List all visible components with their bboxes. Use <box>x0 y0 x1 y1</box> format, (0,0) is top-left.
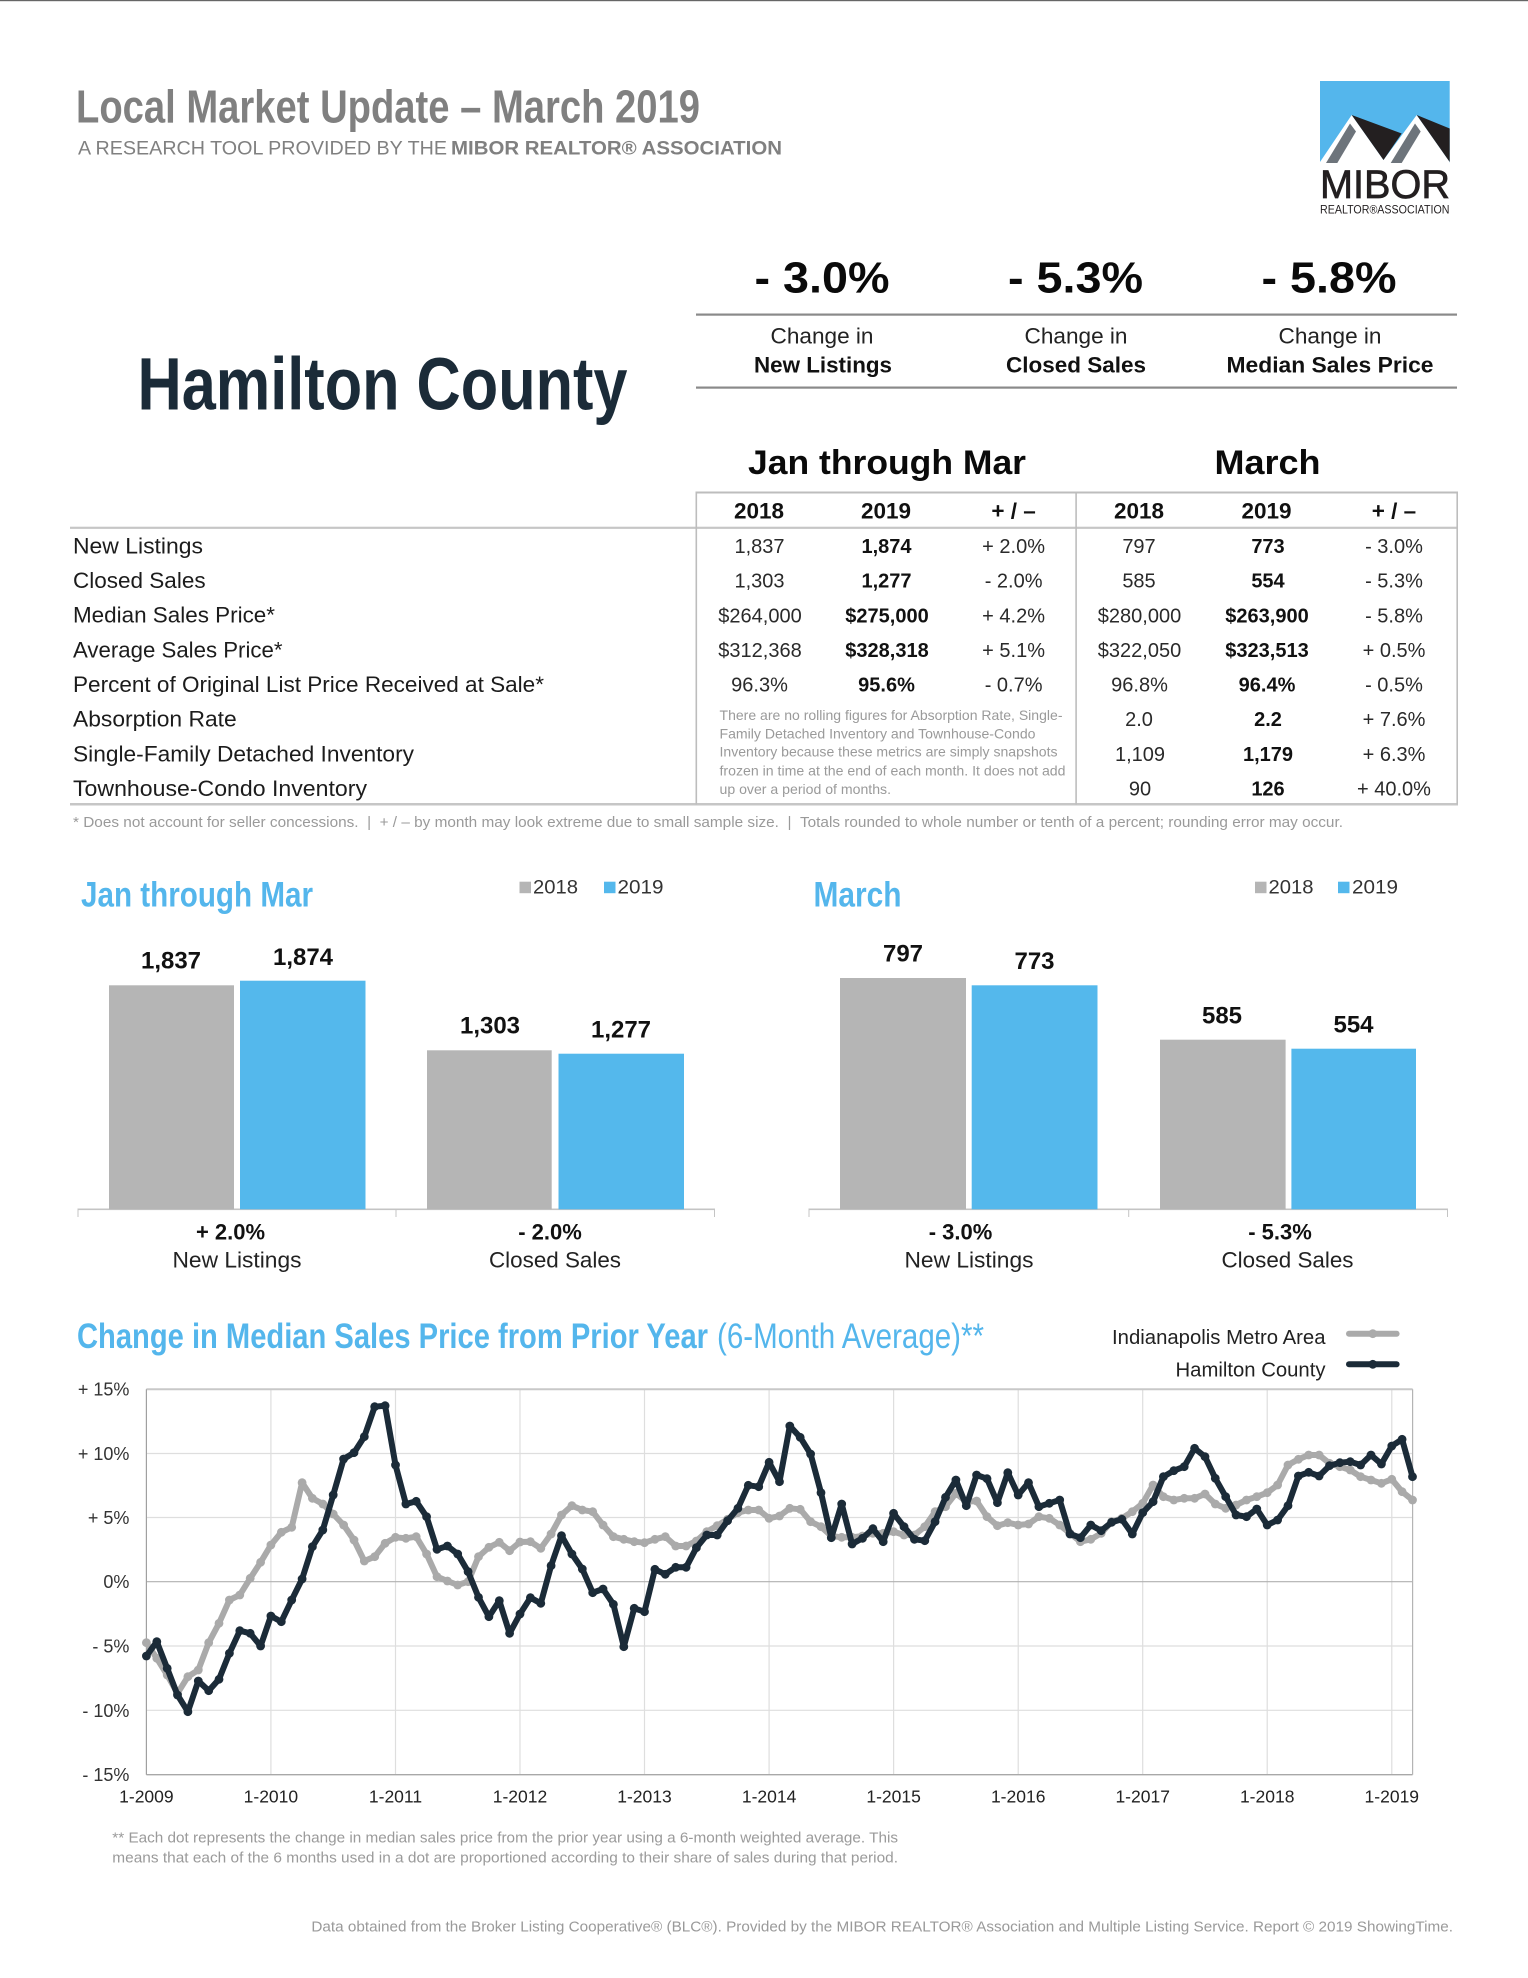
legend: 2019 <box>1352 876 1398 898</box>
row: Single-Family Detached Inventory <box>73 742 1426 767</box>
subtitle: MIBOR REALTOR® ASSOCIATION <box>451 138 782 160</box>
row: Townhouse-Condo Inventory: 90 <box>1129 778 1151 800</box>
category: new listings: + 2.0% <box>196 1219 265 1244</box>
table header row: 2018 <box>734 498 784 523</box>
icon: MIBOR logo: MIBOR <box>1320 163 1450 207</box>
x axis labels: 1-2015 <box>866 1787 921 1807</box>
legend <box>1255 876 1398 898</box>
label: new listings: New Listings <box>754 352 892 377</box>
row: New Listings: - 3.0% <box>1365 536 1423 558</box>
legend <box>520 876 664 898</box>
row: Average Sales Price: $312,368 <box>718 640 802 662</box>
row: Closed Sales: 1,277 <box>861 571 912 593</box>
row: New Listings: + 2.0% <box>982 536 1045 558</box>
label: closed sales: Closed Sales <box>1006 352 1146 377</box>
row: Absorption Rate: Absorption Rate <box>73 707 237 732</box>
row: Closed Sales <box>73 568 1423 593</box>
row: Absorption Rate: + 7.6% <box>1363 709 1426 731</box>
row: Average Sales Price: + 0.5% <box>1363 640 1426 662</box>
note: dot explanation: means that each of the 6 months used in a dot are proportioned according to their share of sales during that period. <box>112 1850 898 1866</box>
title: Local Market Update – March 2019 <box>76 80 700 132</box>
note: no rolling figures: up over a period of months. <box>720 782 891 797</box>
note: no rolling figures: frozen in time at the end of each month. It does not add <box>720 764 1066 779</box>
legend: 2018 <box>1268 876 1314 898</box>
table header row: + / – <box>991 498 1036 523</box>
row: Percent of Original List Price <box>73 672 1423 697</box>
note: no rolling figures <box>720 708 1066 797</box>
row: Percent of Original List Price: Percent of Original List Price Received at Sale* <box>73 672 544 697</box>
table header row: 2018 <box>1114 498 1164 523</box>
x axis labels: 1-2018 <box>1240 1787 1294 1807</box>
row: Closed Sales: 554 <box>1251 571 1286 593</box>
x axis labels: 1-2016 <box>991 1787 1045 1807</box>
category: new listings: New Listings <box>172 1247 302 1272</box>
category: closed sales <box>489 1219 621 1272</box>
row: Percent of Original List Price: 96.4% <box>1239 675 1296 697</box>
row: Average Sales Price <box>73 637 1426 662</box>
x axis labels: 1-2011 <box>369 1787 422 1807</box>
label: median sales price: Change in <box>1278 323 1382 348</box>
bar values: 1,303 <box>460 1012 520 1039</box>
row: Closed Sales: 585 <box>1122 571 1156 593</box>
note: no rolling figures: Family Detached Inventory and Townhouse-Condo <box>720 726 1036 741</box>
heading: line chart title: (6-Month Average)** <box>717 1317 984 1356</box>
row: Median Sales Price: $263,900 <box>1225 605 1309 627</box>
heading: county name: Hamilton County <box>138 342 628 425</box>
row: Absorption Rate <box>73 707 1426 732</box>
bars: closed sales <box>1160 1040 1416 1209</box>
row: Percent of Original List Price: 96.8% <box>1111 675 1168 697</box>
y axis labels: + 10% <box>78 1444 129 1464</box>
row: Absorption Rate: 2.2 <box>1254 709 1282 731</box>
table header row: + / – <box>1372 498 1416 523</box>
row: Percent of Original List Price: - 0.7% <box>985 675 1043 697</box>
heading: line chart title: Change in Median Sales Price from Prior Year <box>77 1317 708 1356</box>
row: Median Sales Price: $275,000 <box>845 605 929 627</box>
heading: Jan through Mar: Jan through Mar <box>748 444 1026 482</box>
bar values: 1,837 <box>141 947 201 974</box>
bar values <box>883 941 1374 1039</box>
x axis labels: 1-2013 <box>617 1787 672 1807</box>
row: Single-Family Detached Inventory: 1,109 <box>1115 744 1165 766</box>
x axis labels: 1-2014 <box>742 1787 797 1807</box>
bar values: 1,277 <box>591 1017 651 1044</box>
x axis labels: 1-2017 <box>1115 1787 1170 1807</box>
row: New Listings: 1,837 <box>734 536 785 558</box>
panel: metrics table <box>70 444 1458 806</box>
row: Percent of Original List Price: - 0.5% <box>1365 675 1423 697</box>
series: Indianapolis Metro Area <box>146 1455 1412 1693</box>
bar values: 554 <box>1333 1012 1374 1039</box>
row: Median Sales Price: Median Sales Price* <box>73 603 275 628</box>
row: Average Sales Price: + 5.1% <box>982 640 1045 662</box>
x axis labels: 1-2010 <box>244 1787 298 1807</box>
label: median sales price <box>1226 323 1434 377</box>
row: Closed Sales: - 2.0% <box>985 571 1043 593</box>
label: closed sales <box>1006 323 1146 377</box>
bar chart: Jan through Mar <box>78 876 715 1272</box>
header: report title <box>76 80 782 160</box>
category: closed sales: Closed Sales <box>489 1247 621 1272</box>
category: closed sales: - 5.3% <box>1248 1219 1312 1244</box>
bar values <box>141 944 651 1044</box>
row: New Listings: New Listings <box>73 534 203 559</box>
y axis labels: - 5% <box>92 1636 129 1656</box>
bar values: 585 <box>1202 1002 1242 1029</box>
row: Single-Family Detached Inventory: 1,179 <box>1243 744 1293 766</box>
category: closed sales <box>1222 1219 1354 1272</box>
row: Townhouse-Condo Inventory <box>73 776 1431 801</box>
label: median sales price: Median Sales Price <box>1226 352 1434 377</box>
x axis labels: 1-2009 <box>119 1787 174 1807</box>
row: Townhouse-Condo Inventory: + 40.0% <box>1357 778 1431 800</box>
row: Median Sales Price: $264,000 <box>718 605 802 627</box>
row: Median Sales Price: $280,000 <box>1098 605 1181 627</box>
x axis labels <box>119 1787 1419 1807</box>
row: Average Sales Price: Average Sales Price* <box>73 637 283 662</box>
category: closed sales: Closed Sales <box>1222 1247 1354 1272</box>
y axis labels: 0% <box>103 1572 129 1592</box>
legend: 2019 <box>618 876 664 898</box>
bars: new listings <box>840 978 1098 1209</box>
row: Townhouse-Condo Inventory: Townhouse-Condo Inventory <box>73 776 368 801</box>
panel: key change figures <box>696 254 1457 389</box>
y axis labels: - 10% <box>82 1701 129 1721</box>
category: new listings <box>904 1219 1034 1272</box>
row: Closed Sales: - 5.3% <box>1365 571 1423 593</box>
legend: 2018 <box>533 876 578 898</box>
row: Absorption Rate: 2.0 <box>1125 709 1153 731</box>
heading: Jan through Mar <box>81 876 313 915</box>
table header row: 2019 <box>861 498 911 523</box>
row: New Listings: 1,874 <box>861 536 912 558</box>
category: new listings: New Listings <box>904 1247 1034 1272</box>
row: Average Sales Price: $322,050 <box>1098 640 1181 662</box>
table header row: 2019 <box>1241 498 1292 523</box>
footer: data source: Data obtained from the Broker Listing Cooperative® (BLC®). Provided by the MIBOR REALTOR® Association and Multiple Listing Service. Report © 2019 ShowingTime. <box>311 1920 1453 1936</box>
note: dot explanation: ** Each dot represents the change in median sales price from the prior year using a 6-month weighted average. This <box>112 1831 898 1847</box>
heading: March: March <box>1214 444 1320 482</box>
row: Single-Family Detached Inventory: Single-Family Detached Inventory <box>73 742 415 767</box>
row: Townhouse-Condo Inventory: 126 <box>1251 778 1285 800</box>
line chart: change in median sales price <box>78 1380 1419 1807</box>
subtitle: A RESEARCH TOOL PROVIDED BY THE <box>78 138 447 160</box>
x axis labels: 1-2012 <box>493 1787 547 1807</box>
bar chart: March <box>808 876 1448 1272</box>
row: Percent of Original List Price: 95.6% <box>858 675 915 697</box>
note: no rolling figures: There are no rolling figures for Absorption Rate, Single- <box>720 708 1062 723</box>
plot grid <box>146 1389 1413 1775</box>
heading: March <box>814 876 902 915</box>
legend: line chart <box>1112 1326 1397 1382</box>
note: dot explanation <box>112 1831 898 1866</box>
bar values: 773 <box>1014 948 1055 975</box>
category: new listings <box>172 1219 302 1272</box>
icon: MIBOR logo: REALTOR®ASSOCIATION <box>1320 204 1450 216</box>
row: Median Sales Price: + 4.2% <box>982 605 1045 627</box>
note: no rolling figures: Inventory because these metrics are simply snapshots <box>720 745 1058 760</box>
row: New Listings: 773 <box>1251 536 1285 558</box>
y axis labels: + 5% <box>88 1508 129 1528</box>
table header row <box>734 498 1416 523</box>
category: new listings: - 3.0% <box>929 1219 992 1244</box>
bars: new listings <box>109 981 366 1209</box>
icon: MIBOR logo <box>1320 81 1450 216</box>
category: closed sales: - 2.0% <box>518 1219 582 1244</box>
row: Average Sales Price: $328,318 <box>845 640 929 662</box>
stat: new listings change: - 3.0% <box>754 254 890 303</box>
row: New Listings: 797 <box>1122 536 1156 558</box>
row: Average Sales Price: $323,513 <box>1225 640 1309 662</box>
legend: line chart: Indianapolis Metro Area <box>1112 1326 1326 1349</box>
bars: closed sales <box>427 1050 684 1209</box>
subtitle <box>78 138 782 160</box>
label: new listings <box>754 323 892 377</box>
bar values: 1,874 <box>273 944 334 971</box>
x axis labels: 1-2019 <box>1365 1787 1419 1807</box>
y axis labels: - 15% <box>82 1765 129 1785</box>
row: Closed Sales: Closed Sales <box>73 568 206 593</box>
series: Hamilton County <box>146 1406 1412 1712</box>
bar values: 797 <box>883 941 923 968</box>
row: Single-Family Detached Inventory: + 6.3% <box>1363 744 1426 766</box>
y axis labels: + 15% <box>78 1380 129 1400</box>
row: Closed Sales: 1,303 <box>734 571 785 593</box>
legend: line chart: Hamilton County <box>1176 1359 1326 1382</box>
row: New Listings <box>73 534 1423 559</box>
label: closed sales: Change in <box>1024 323 1128 348</box>
row: Median Sales Price: - 5.8% <box>1365 605 1423 627</box>
y axis labels <box>78 1380 129 1785</box>
row: Median Sales Price <box>73 603 1423 628</box>
row: Percent of Original List Price: 96.3% <box>731 675 788 697</box>
footnote: table caveats: * Does not account for seller concessions. | + / – by month may look extreme due to small sample size. | Totals rounded to whole number or tenth of a percent; rounding error may occur. <box>73 815 1343 831</box>
label: new listings: Change in <box>770 323 874 348</box>
stat: closed sales change: - 5.3% <box>1008 254 1143 303</box>
stat: median sales price change: - 5.8% <box>1262 254 1396 303</box>
